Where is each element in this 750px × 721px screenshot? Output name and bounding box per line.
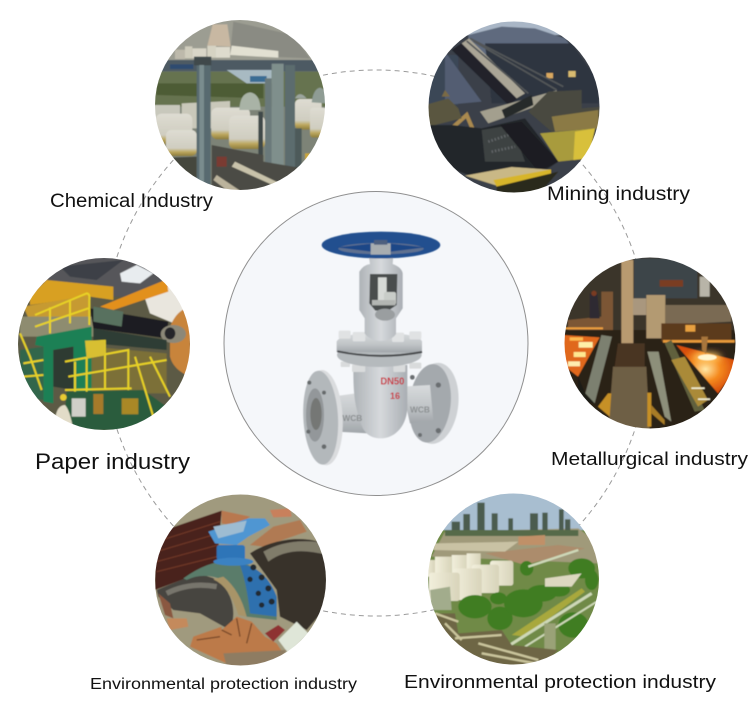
label: Mining industry: Mining industry (547, 184, 691, 205)
flange (183, 561, 277, 620)
icon: gate valve (301, 232, 462, 466)
upper bolts (339, 331, 421, 342)
body markings: WCB (410, 405, 430, 415)
pipe yard foreground (173, 156, 198, 178)
spark (693, 337, 721, 362)
right pipe (402, 385, 433, 423)
worker (55, 404, 74, 424)
rock pile (425, 118, 558, 175)
lower bolts (341, 362, 421, 372)
bucket (452, 111, 475, 128)
storage tanks (150, 88, 327, 156)
label: Chemical Industry: Chemical Industry (50, 191, 214, 212)
trees (458, 558, 598, 638)
paper roll and drums (90, 308, 168, 338)
panel: environmental protection refinery photo (428, 494, 599, 664)
grass strip (512, 588, 585, 637)
center pit floor (608, 367, 650, 430)
excavator boom (452, 43, 517, 104)
yellow crane (30, 280, 113, 305)
white storage tanks (425, 553, 513, 601)
yellow truck (465, 167, 550, 186)
valve body (353, 365, 407, 438)
panel: mining industry photo (425, 15, 605, 195)
glowing steel plates (563, 335, 600, 377)
yellow railings (20, 293, 170, 417)
yoke window (369, 274, 397, 311)
body markings: DN50 (380, 377, 405, 388)
label: Paper industry: Paper industry (35, 449, 191, 474)
label: Environmental protection industry, left: Environmental protection industry (90, 676, 357, 693)
body markings: WCB (342, 413, 362, 423)
label: Environmental protection industry, right: Environmental protection industry (404, 671, 717, 692)
pipes (250, 539, 327, 630)
rubble bricks (190, 617, 283, 665)
gearbox actuator (208, 518, 270, 545)
pipeline corridor (510, 550, 597, 647)
left end flange (301, 369, 345, 466)
roller tables (585, 335, 612, 403)
panel: central valve circle (224, 192, 528, 496)
right end flange (405, 360, 462, 446)
left pipe (337, 392, 368, 433)
dashed connecting ring (103, 70, 649, 616)
panel: chemical industry photo (155, 20, 325, 190)
body markings (342, 377, 430, 423)
green press frame (35, 327, 92, 403)
distant towers (451, 502, 571, 531)
furnaces and machinery (568, 292, 613, 330)
foreground pipes (436, 613, 558, 664)
bonnet flange (337, 333, 422, 367)
body markings: 16 (390, 391, 400, 401)
label: Metallurgical industry: Metallurgical industry (551, 448, 749, 469)
neck and yoke (359, 255, 403, 341)
panel: environmental protection pipeline valve photo (155, 494, 326, 666)
machine body (528, 90, 602, 132)
panel: paper industry photo (18, 258, 190, 430)
brick wall (155, 511, 222, 590)
panel: metallurgical industry photo (564, 258, 736, 428)
stem and nut (372, 277, 396, 321)
handwheel (322, 232, 440, 258)
distillation towers (194, 57, 302, 188)
